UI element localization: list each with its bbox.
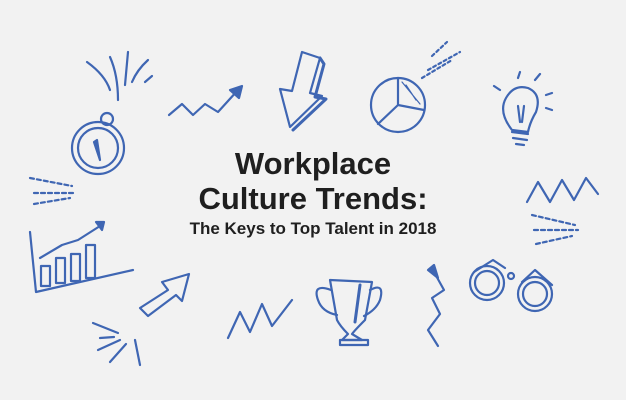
title: Culture Trends: xyxy=(198,181,428,216)
icon: trophy xyxy=(317,280,381,345)
icon: burst top right xyxy=(422,42,460,78)
icon: down arrow xyxy=(280,52,326,130)
icon: binoculars xyxy=(470,260,552,311)
icon: bar chart xyxy=(30,222,133,292)
subtitle: The Keys to Top Talent in 2018 xyxy=(190,219,436,238)
icon: burst bottom left xyxy=(93,323,140,365)
icon: up-right arrow xyxy=(140,274,189,316)
icon: zigzag right xyxy=(527,178,598,202)
icon: zigzag bottom xyxy=(228,300,292,338)
icon: compass xyxy=(72,113,124,174)
icon: burst above compass xyxy=(87,52,152,100)
title xyxy=(198,146,428,216)
icon: up arrow zigzag xyxy=(428,265,444,346)
title: Workplace xyxy=(235,146,391,181)
icon: light bulb xyxy=(494,72,552,145)
icon: dashed lines right xyxy=(532,215,578,244)
icon: zigzag arrow xyxy=(169,86,242,115)
icon: pie chart xyxy=(371,78,425,132)
icon: dashed lines left xyxy=(30,178,74,204)
